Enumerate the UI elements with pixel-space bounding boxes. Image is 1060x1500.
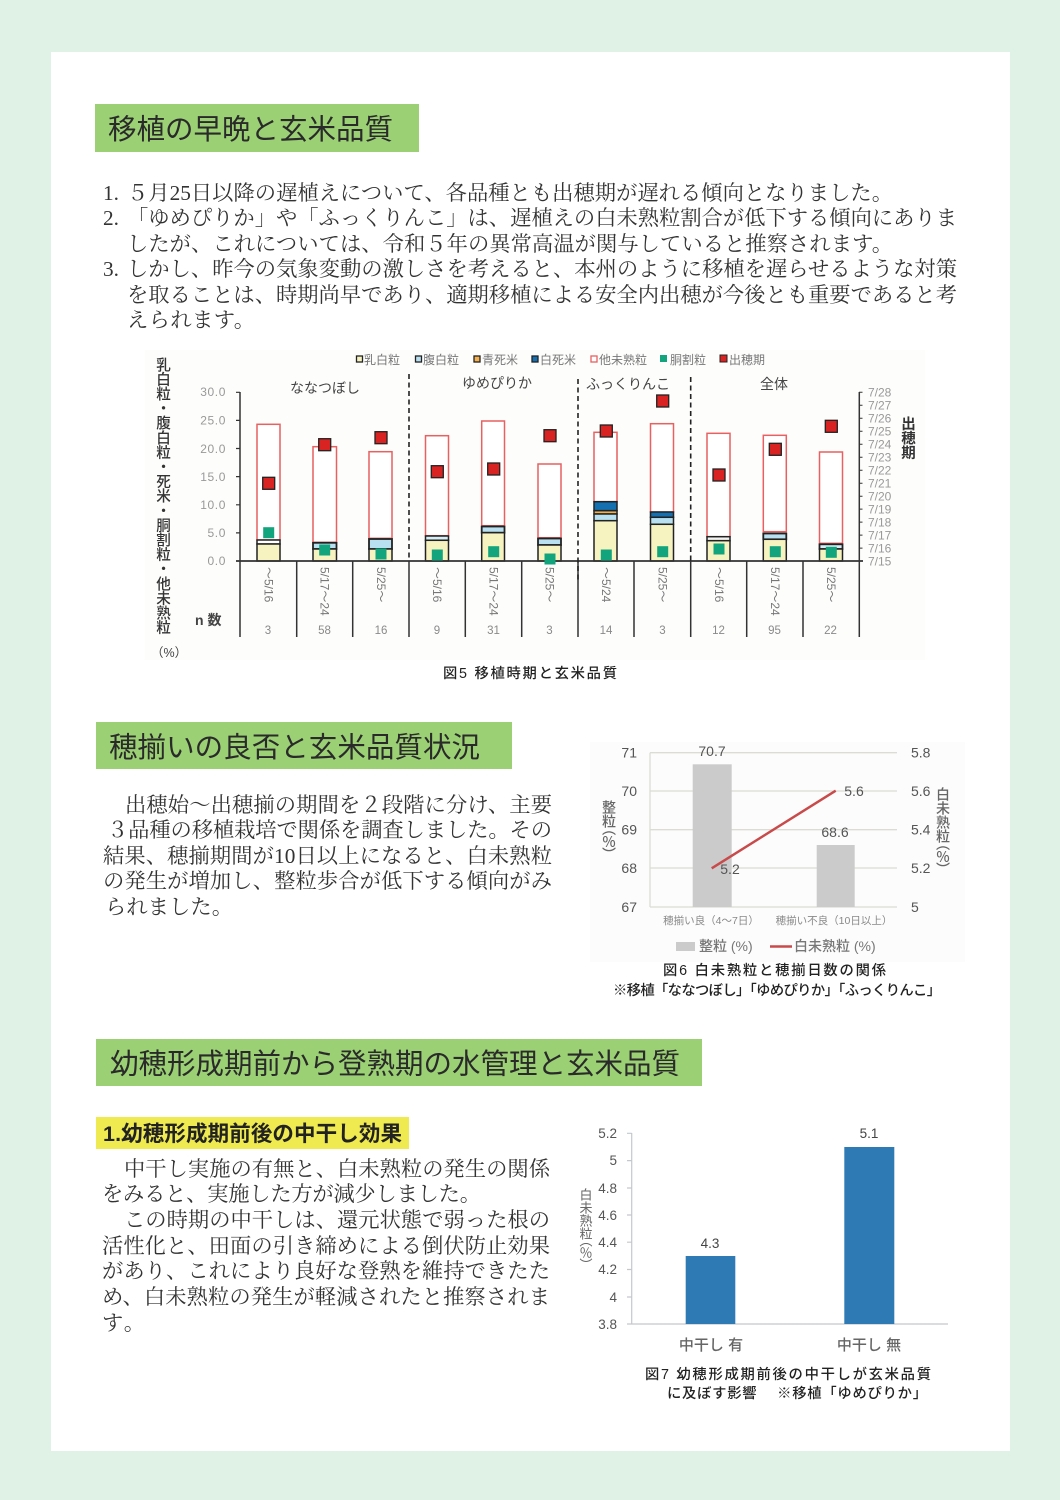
tick labels: 4.6 bbox=[598, 1208, 617, 1223]
text block: numbered list: 1. bbox=[103, 181, 119, 205]
n values: 3 bbox=[265, 625, 271, 637]
right axis title: 出穂期 bbox=[899, 416, 915, 461]
gridlines bbox=[650, 753, 897, 907]
legend: 他未熟粒 bbox=[599, 352, 647, 367]
text block: numbered list: 3. bbox=[103, 257, 119, 281]
legend: 腹白粒 bbox=[423, 352, 459, 367]
right tick labels: 5.8 bbox=[911, 744, 931, 760]
heading: 移植の早晩と玄米品質 bbox=[95, 104, 419, 152]
left tick labels: 68 bbox=[621, 860, 637, 876]
legend: 白死米 bbox=[540, 352, 576, 367]
transplant date labels: 5/25～ bbox=[824, 567, 838, 602]
right tick labels: 5.6 bbox=[911, 783, 931, 799]
n values: 16 bbox=[375, 625, 387, 637]
right tick labels: 7/19 bbox=[868, 502, 892, 516]
chart: 中干しと白未熟粒 bar chart bbox=[578, 1126, 948, 1354]
tick labels: 5.2 bbox=[598, 1126, 617, 1141]
text block: 中干し: 活性化と、田面の引き締めによる倒伏防止効果 bbox=[102, 1234, 550, 1258]
axis titles: 整粒（％） bbox=[601, 800, 617, 855]
n values: 9 bbox=[434, 625, 440, 637]
chart: 整粒 and 白未熟粒 combo chart bbox=[590, 742, 965, 962]
left tick labels: 69 bbox=[621, 822, 637, 838]
text block: 中干し: この時期の中干しは、還元状態で弱った根の bbox=[124, 1208, 550, 1232]
subheading: 幼穂形成期前後の中干し効果: 1.幼穂形成期前後の中干し効果 bbox=[103, 1122, 402, 1146]
data labels: 4.3 bbox=[701, 1236, 719, 1251]
text block: 中干し: があり、これにより良好な登熟を維持できたた bbox=[102, 1259, 550, 1283]
text block: numbered list: しかし、昨今の気象変動の激しさを考えると、本州のように移植を遅らせるような対策 bbox=[127, 257, 957, 281]
chart: stacked bars of 移植時期と玄米品質 bbox=[145, 350, 925, 660]
legend: 整粒 (%) bbox=[699, 938, 753, 954]
right tick labels: 7/15 bbox=[868, 554, 892, 568]
tick labels: 4.4 bbox=[598, 1235, 617, 1250]
axis title: 白未熟粒（％） bbox=[578, 1187, 592, 1265]
transplant date labels: 5/17～24 bbox=[486, 567, 500, 616]
group names: ななつぼし bbox=[290, 380, 360, 396]
right tick labels: 7/25 bbox=[868, 424, 892, 438]
right tick labels: 7/16 bbox=[868, 542, 892, 556]
category labels: 中干し 無 bbox=[837, 1337, 901, 1354]
category labels: 穂揃い不良（10日以上） bbox=[776, 914, 892, 927]
text block: 中干し: す。 bbox=[102, 1311, 145, 1335]
legend: 白未熟粒 (%) bbox=[794, 938, 876, 954]
data labels: 5.1 bbox=[860, 1126, 878, 1141]
text block: 穂揃い: 出穂始～出穂揃の期間を２段階に分け、主要 bbox=[125, 793, 552, 817]
left tick labels: 30.0 bbox=[200, 385, 226, 399]
group names: 全体 bbox=[760, 376, 788, 392]
text block: 穂揃い: ３品種の移植栽培で関係を調査しました。その bbox=[107, 818, 552, 842]
text block: numbered list: えられます。 bbox=[127, 308, 255, 332]
right tick labels: 5.4 bbox=[911, 822, 931, 838]
n values: 31 bbox=[487, 625, 500, 637]
transplant date labels: ～5/16 bbox=[262, 567, 276, 603]
tick labels: 4 bbox=[609, 1290, 617, 1305]
group names: ふっくりんこ bbox=[586, 376, 670, 392]
heading: 幼穂形成期前から登熟期の水管理と玄米品質 bbox=[96, 1039, 702, 1086]
right tick labels bbox=[911, 744, 931, 915]
text block: numbered list: を取ることは、時期尚早であり、適期移植による安全内出穂が今後とも重要であると考 bbox=[127, 283, 957, 307]
tick labels: 4.2 bbox=[598, 1262, 617, 1277]
axis bbox=[627, 1133, 948, 1324]
left tick labels: 25.0 bbox=[200, 414, 226, 428]
text block: numbered list bbox=[103, 181, 957, 332]
transplant date labels: 5/17～24 bbox=[318, 567, 332, 616]
right tick labels: 7/21 bbox=[868, 476, 892, 490]
category labels bbox=[679, 1337, 901, 1354]
right tick labels bbox=[868, 386, 892, 568]
tick labels bbox=[598, 1126, 617, 1332]
green cracked-grain markers bbox=[263, 527, 837, 564]
heading: 幼穂形成期前から登熟期の水管理と玄米品質: 幼穂形成期前から登熟期の水管理と玄米品質 bbox=[110, 1048, 680, 1080]
text block: 中干し: をみると、実施した方が減少しました。 bbox=[102, 1182, 481, 1206]
transplant date labels: 5/25～ bbox=[542, 567, 556, 602]
right tick labels: 7/17 bbox=[868, 528, 892, 542]
legend: 青死米 bbox=[482, 353, 518, 367]
heading: 穂揃いの良否と玄米品質状況: 穂揃いの良否と玄米品質状況 bbox=[109, 732, 480, 764]
group names bbox=[290, 375, 788, 396]
heading: 穂揃いの良否と玄米品質状況 bbox=[96, 722, 512, 769]
transplant date labels: 5/25～ bbox=[656, 567, 670, 602]
transplant date labels: 5/17～24 bbox=[768, 567, 782, 616]
left tick labels: 20.0 bbox=[200, 442, 226, 456]
caption: figure 7: に及ぼす影響 ※移植「ゆめぴりか」 bbox=[667, 1385, 927, 1402]
n values: 22 bbox=[824, 625, 837, 637]
text block: 中干し bbox=[102, 1157, 551, 1335]
caption: figure 7: 図7 幼穂形成期前後の中干しが玄米品質 bbox=[645, 1365, 931, 1383]
right tick labels: 5 bbox=[911, 899, 919, 915]
right tick labels: 7/28 bbox=[868, 386, 892, 400]
text block: 穂揃い: られました。 bbox=[105, 895, 233, 919]
n values: 12 bbox=[712, 625, 725, 637]
tick labels: 3.8 bbox=[598, 1317, 617, 1332]
n values: 3 bbox=[546, 625, 553, 637]
caption: figure 7 bbox=[645, 1365, 931, 1402]
right tick labels: 7/20 bbox=[868, 490, 892, 504]
n values: 14 bbox=[600, 625, 613, 637]
blue bars bbox=[686, 1147, 894, 1324]
percent unit: （%） bbox=[151, 646, 187, 660]
legend bbox=[676, 938, 876, 954]
heading: 移植の早晩と玄米品質: 移植の早晩と玄米品質 bbox=[108, 114, 393, 146]
right tick labels: 5.2 bbox=[911, 860, 931, 876]
text block: 中干し: 中干し実施の有無と、白未熟粒の発生の関係 bbox=[124, 1157, 551, 1181]
text block: numbered list: したが、これについては、令和５年の異常高温が関与していると推察されます。 bbox=[127, 232, 893, 256]
transplant date labels: ～5/16 bbox=[712, 567, 726, 603]
right tick labels: 7/23 bbox=[868, 450, 892, 464]
text block: 穂揃い: 結果、穂揃期間が10日以上になると、白未熟粒 bbox=[103, 844, 552, 868]
chart: 整粒 and 白未熟粒 combo chart: 白未熟粒（％） bbox=[935, 787, 951, 870]
right tick labels: 7/24 bbox=[868, 438, 892, 452]
left tick labels bbox=[200, 385, 226, 568]
caption: figure 6 bbox=[613, 962, 941, 999]
data labels: 5.2 bbox=[720, 861, 740, 877]
legend: 乳白粒 bbox=[364, 352, 400, 367]
right tick labels: 7/26 bbox=[868, 412, 892, 426]
transplant date labels: ～5/24 bbox=[599, 567, 613, 603]
n values: 3 bbox=[659, 625, 666, 637]
legend: 胴割粒 bbox=[670, 352, 706, 367]
left tick labels: 70 bbox=[621, 783, 637, 799]
transplant date labels: ～5/16 bbox=[430, 567, 444, 603]
bars bbox=[257, 421, 842, 561]
n label: n 数 bbox=[195, 612, 221, 628]
category labels: 中干し 有 bbox=[679, 1337, 743, 1354]
transplant date labels: 5/25～ bbox=[374, 567, 388, 602]
red line bbox=[712, 791, 836, 868]
text block: 中干し: め、白未熟粒の発生が軽減されたと推察されま bbox=[102, 1285, 550, 1309]
data labels: 68.6 bbox=[821, 824, 849, 840]
right tick labels: 7/22 bbox=[868, 464, 892, 478]
category labels bbox=[663, 914, 892, 927]
transplant date labels bbox=[262, 567, 838, 616]
left tick labels: 71 bbox=[621, 744, 637, 760]
y axis title: 乳白粒・腹白粒・死米・胴割粒・他未熟粒 bbox=[154, 357, 170, 635]
tick labels: 5 bbox=[609, 1153, 617, 1168]
n values: 58 bbox=[318, 625, 331, 637]
right tick labels: 7/27 bbox=[868, 398, 892, 412]
caption: figure 6: 図6 白未熟粒と穂揃日数の関係 bbox=[663, 962, 887, 979]
text block: 穂揃い bbox=[103, 793, 552, 919]
grey bars bbox=[693, 764, 855, 907]
text block: 穂揃い: の発生が増加し、整粒歩合が低下する傾向がみ bbox=[103, 869, 552, 893]
data labels bbox=[698, 743, 864, 877]
right tick labels: 7/18 bbox=[868, 516, 892, 530]
axes and dividers bbox=[236, 374, 863, 637]
legend bbox=[356, 352, 765, 367]
tick labels: 4.8 bbox=[598, 1181, 617, 1196]
text block: numbered list: 2. bbox=[103, 206, 119, 230]
data labels: 70.7 bbox=[698, 743, 726, 759]
group names: ゆめぴりか bbox=[462, 375, 532, 391]
text block: numbered list: ５月25日以降の遅植えについて、各品種とも出穂期が遅れる傾向となりました。 bbox=[127, 181, 893, 205]
legend: 出穂期 bbox=[729, 353, 765, 367]
red heading-date markers bbox=[263, 395, 837, 489]
left tick labels: 0.0 bbox=[208, 554, 226, 568]
left tick labels: 5.0 bbox=[208, 526, 226, 540]
n values bbox=[265, 625, 837, 637]
left tick labels: 10.0 bbox=[200, 498, 226, 512]
caption: figure 6: ※移植「ななつぼし」「ゆめぴりか」「ふっくりんこ」 bbox=[613, 982, 941, 999]
data labels: 5.6 bbox=[844, 783, 864, 799]
data labels bbox=[701, 1126, 878, 1251]
caption: figure 5: 図5 移植時期と玄米品質 bbox=[443, 664, 617, 682]
n values: 95 bbox=[768, 625, 781, 637]
text block: numbered list: 「ゆめぴりか」や「ふっくりんこ」は、遅植えの白未熟粒割合が低下する傾向にありま bbox=[127, 206, 957, 230]
left tick labels: 67 bbox=[621, 899, 637, 915]
left tick labels bbox=[621, 744, 637, 915]
left tick labels: 15.0 bbox=[200, 470, 226, 484]
category labels: 穂揃い良（4～7日） bbox=[663, 914, 759, 927]
